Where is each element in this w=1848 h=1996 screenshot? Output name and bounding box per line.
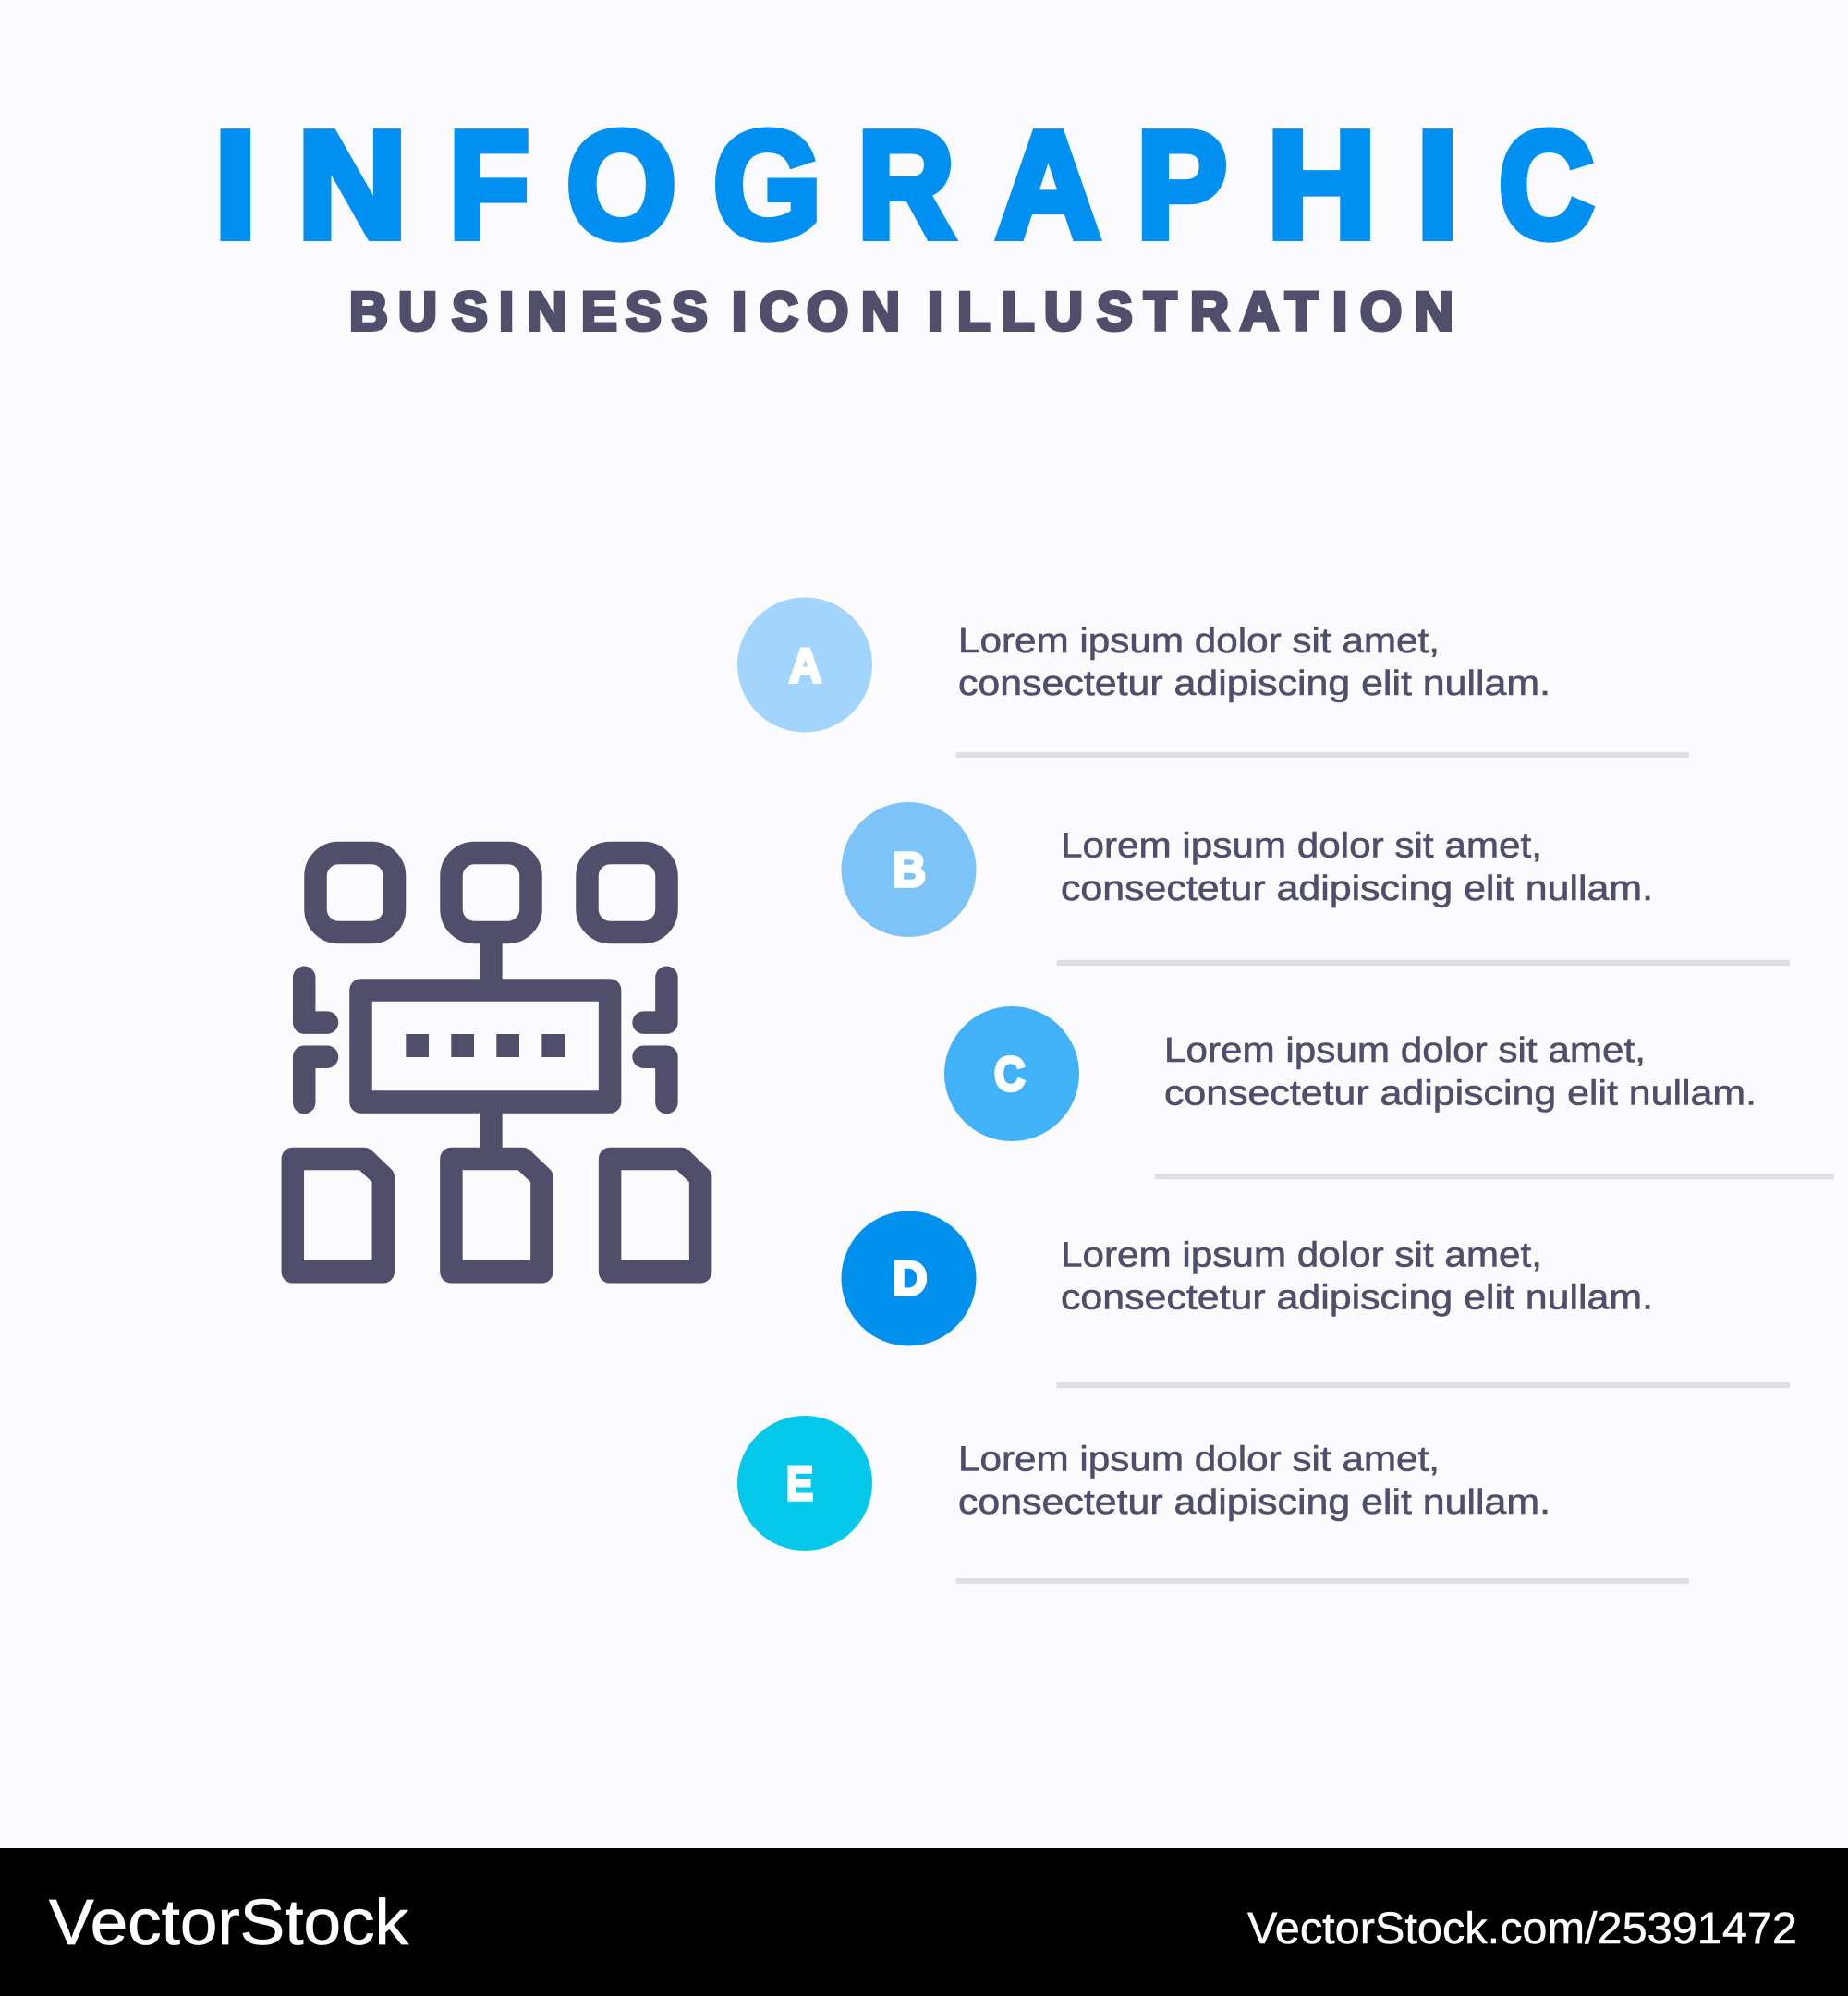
item B (841, 802, 1790, 966)
text D (1061, 1236, 1653, 1318)
icon: left document (293, 1159, 383, 1272)
footer bar (0, 1848, 1848, 1996)
text B (1061, 827, 1653, 908)
title: R (857, 100, 954, 270)
title: G (713, 100, 821, 270)
text E (958, 1441, 1550, 1522)
icon: top right node (588, 853, 667, 932)
letter B: B (893, 844, 926, 897)
footer logo: VectorStock (49, 1886, 409, 1958)
icon: right brackets (644, 978, 666, 1102)
text A (958, 622, 1550, 703)
icon: top middle node (451, 853, 530, 932)
text B: Lorem ipsum dolor sit amet, (1061, 827, 1542, 866)
text C: consectetur adipiscing elit nullam. (1164, 1074, 1757, 1113)
icon: right document (610, 1159, 700, 1272)
badge B (841, 802, 976, 937)
badge D (841, 1211, 976, 1345)
divider A (955, 752, 1689, 758)
divider B (1057, 960, 1790, 966)
divider E (955, 1578, 1689, 1584)
title: A (996, 100, 1100, 270)
icon: top left node (316, 853, 395, 932)
icon: left brackets (304, 978, 327, 1102)
item D (841, 1211, 1790, 1388)
text D: Lorem ipsum dolor sit amet, (1061, 1236, 1542, 1275)
title: H (1267, 100, 1376, 270)
badge E (737, 1416, 872, 1551)
title: I (214, 100, 257, 270)
text B: consectetur adipiscing elit nullam. (1061, 870, 1653, 908)
title: I (1416, 100, 1459, 270)
text D: consectetur adipiscing elit nullam. (1061, 1279, 1653, 1318)
badge C (944, 1006, 1079, 1141)
text A: consectetur adipiscing elit nullam. (958, 664, 1550, 703)
title: P (1137, 100, 1227, 270)
item A (737, 597, 1689, 758)
divider D (1057, 1382, 1790, 1388)
footer url: VectorStock.com/25391472 (1247, 1905, 1797, 1953)
title: O (566, 100, 676, 270)
icon: network diagram (293, 853, 700, 1272)
icon: central panel (360, 991, 610, 1101)
item C (944, 1006, 1834, 1179)
subtitle: BUSINESS ICON ILLUSTRATION (349, 282, 1453, 342)
title: C (1499, 100, 1594, 270)
icon: panel dots (406, 1034, 565, 1057)
icon: lower connector (480, 1101, 503, 1155)
text E: consectetur adipiscing elit nullam. (958, 1483, 1550, 1522)
item E (737, 1416, 1689, 1584)
text A: Lorem ipsum dolor sit amet, (958, 622, 1440, 661)
badge A (737, 597, 872, 732)
title: N (298, 100, 407, 270)
icon: upper connector (480, 938, 503, 990)
text E: Lorem ipsum dolor sit amet, (958, 1441, 1440, 1479)
text C: Lorem ipsum dolor sit amet, (1164, 1031, 1646, 1070)
divider C (1155, 1174, 1834, 1179)
text C (1164, 1031, 1757, 1113)
title (214, 100, 1594, 270)
letter D: D (893, 1252, 928, 1306)
title: F (449, 100, 529, 270)
letter A: A (789, 639, 821, 693)
letter C: C (994, 1048, 1026, 1101)
icon: middle document (451, 1159, 541, 1272)
letter E: E (786, 1457, 813, 1511)
